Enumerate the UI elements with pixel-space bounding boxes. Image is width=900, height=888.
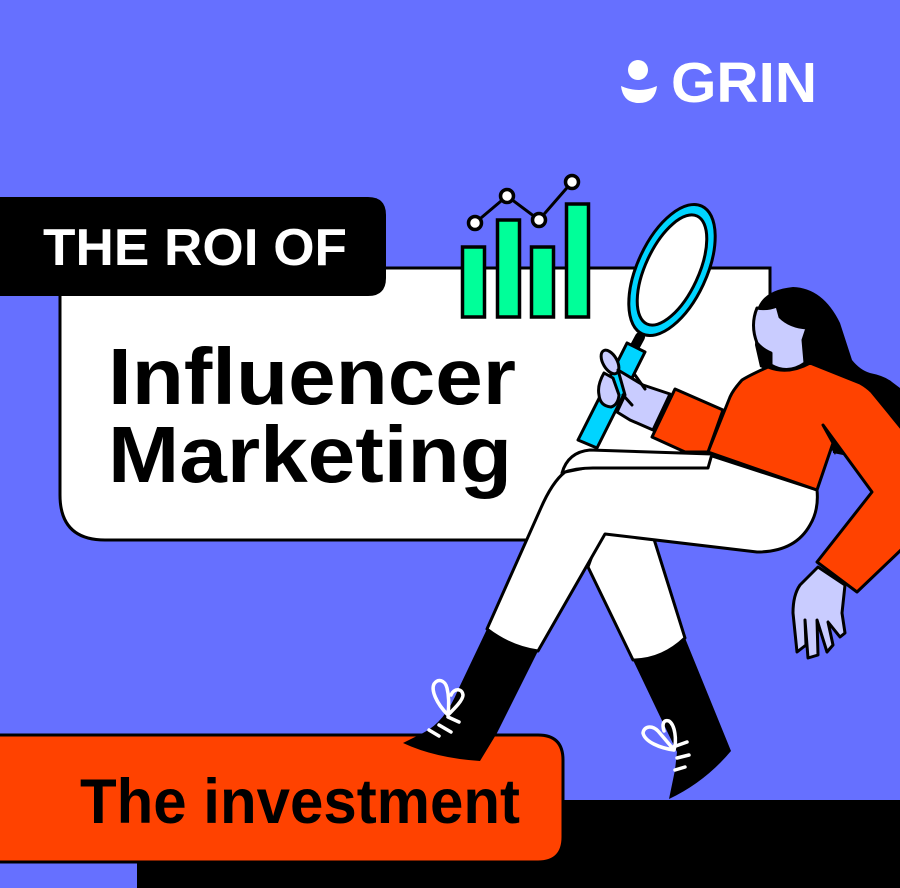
title: Influencer Marketing bbox=[108, 332, 516, 499]
back leg bbox=[588, 520, 685, 660]
right boot bbox=[633, 638, 731, 799]
icon: bar chart with trend line bbox=[462, 176, 588, 317]
heading banner: THE ROI OF: THE ROI OF bbox=[43, 219, 347, 277]
left hand bbox=[597, 347, 670, 430]
face and neck bbox=[754, 306, 807, 370]
left sleeve cuff bbox=[652, 389, 723, 452]
heading banner: THE ROI OF bbox=[0, 197, 386, 296]
magnifying glass bbox=[578, 192, 733, 448]
right hand bbox=[793, 567, 845, 658]
hair bbox=[755, 287, 900, 455]
title: Influencer Marketing: Marketing bbox=[108, 410, 512, 499]
title: Influencer Marketing: Influencer bbox=[108, 332, 516, 421]
logo: GRIN: GRIN bbox=[671, 51, 817, 115]
panel: title card bbox=[60, 268, 770, 540]
laces: right boot bbox=[643, 721, 689, 770]
front leg and thigh bbox=[487, 456, 817, 651]
torso and right arm bbox=[708, 363, 900, 592]
banner: The investment bbox=[0, 735, 563, 862]
laces: left boot bbox=[429, 681, 463, 736]
illustration: woman with magnifying glass bbox=[403, 192, 900, 799]
underarm hair shadow bbox=[833, 443, 848, 456]
banner: The investment: The investment bbox=[80, 767, 520, 837]
floor band bbox=[137, 800, 900, 888]
lap fold bbox=[562, 450, 712, 473]
left boot bbox=[403, 629, 538, 761]
